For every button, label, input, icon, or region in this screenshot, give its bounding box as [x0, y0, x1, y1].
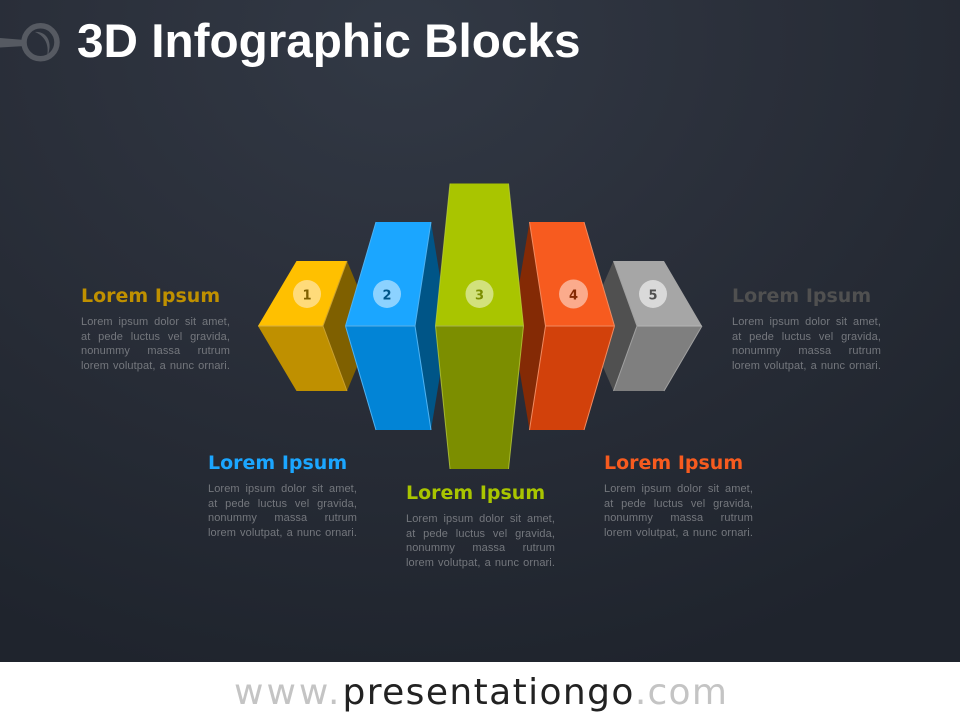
- number badge 1: [293, 280, 321, 308]
- number badge 2: 2: [382, 288, 392, 304]
- text block 2: [208, 452, 357, 539]
- text block 2: Lorem ipsum dolor sit amet,: [208, 483, 357, 495]
- text block 4: Lorem Ipsum: [604, 452, 743, 474]
- block 2 blue: [346, 222, 440, 430]
- number badge 3: 3: [475, 288, 484, 304]
- text block 3: [406, 482, 555, 569]
- text block 5: Lorem ipsum dolor sit amet,: [732, 316, 881, 328]
- text block 2: nonummy massa rutrum: [208, 512, 357, 524]
- text block 4: Lorem ipsum dolor sit amet,: [604, 483, 753, 495]
- number badge 5: [639, 280, 667, 308]
- text block 1: [81, 285, 230, 372]
- text block 5: lorem volutpat, a nunc ornari.: [732, 360, 881, 372]
- number badge 5: 5: [648, 288, 658, 304]
- text block 5: nonummy massa rutrum: [732, 345, 881, 357]
- block 5 gray: [603, 261, 702, 391]
- text block 4: at pede luctus vel gravida,: [604, 498, 753, 510]
- text block 4: nonummy massa rutrum: [604, 512, 753, 524]
- text block 1: Lorem ipsum dolor sit amet,: [81, 316, 230, 328]
- text block 1: Lorem Ipsum: [81, 285, 220, 307]
- number badge 1: 1: [302, 288, 312, 304]
- text block 2: Lorem Ipsum: [208, 452, 347, 474]
- text block 2: at pede luctus vel gravida,: [208, 498, 357, 510]
- number badge 3: [466, 280, 494, 308]
- text block 3: at pede luctus vel gravida,: [406, 528, 555, 540]
- block 3 green: [436, 184, 524, 469]
- block 1 yellow: [258, 261, 357, 391]
- text block 3: lorem volutpat, a nunc ornari.: [406, 557, 555, 569]
- text block 3: nonummy massa rutrum: [406, 542, 555, 554]
- text block 4: lorem volutpat, a nunc ornari.: [604, 527, 753, 539]
- number badge 2: [373, 280, 401, 308]
- text block 4: [604, 452, 753, 539]
- title: 3D Infographic Blocks: [77, 15, 580, 68]
- footer website address: www.presentationgo.com: [234, 672, 728, 713]
- block 4 orange: [520, 222, 614, 430]
- text block 1: nonummy massa rutrum: [81, 345, 230, 357]
- number badge 4: 4: [569, 288, 578, 304]
- footer band: [0, 662, 960, 720]
- number badge 4: [559, 280, 588, 308]
- text block 1: lorem volutpat, a nunc ornari.: [81, 360, 230, 372]
- text block 3: Lorem Ipsum: [406, 482, 545, 504]
- title icon: ring with stem: [0, 23, 60, 62]
- text block 5: at pede luctus vel gravida,: [732, 331, 881, 343]
- text block 2: lorem volutpat, a nunc ornari.: [208, 527, 357, 539]
- text block 5: [732, 285, 881, 372]
- text block 5: Lorem Ipsum: [732, 285, 871, 307]
- text block 3: Lorem ipsum dolor sit amet,: [406, 513, 555, 525]
- text block 1: at pede luctus vel gravida,: [81, 331, 230, 343]
